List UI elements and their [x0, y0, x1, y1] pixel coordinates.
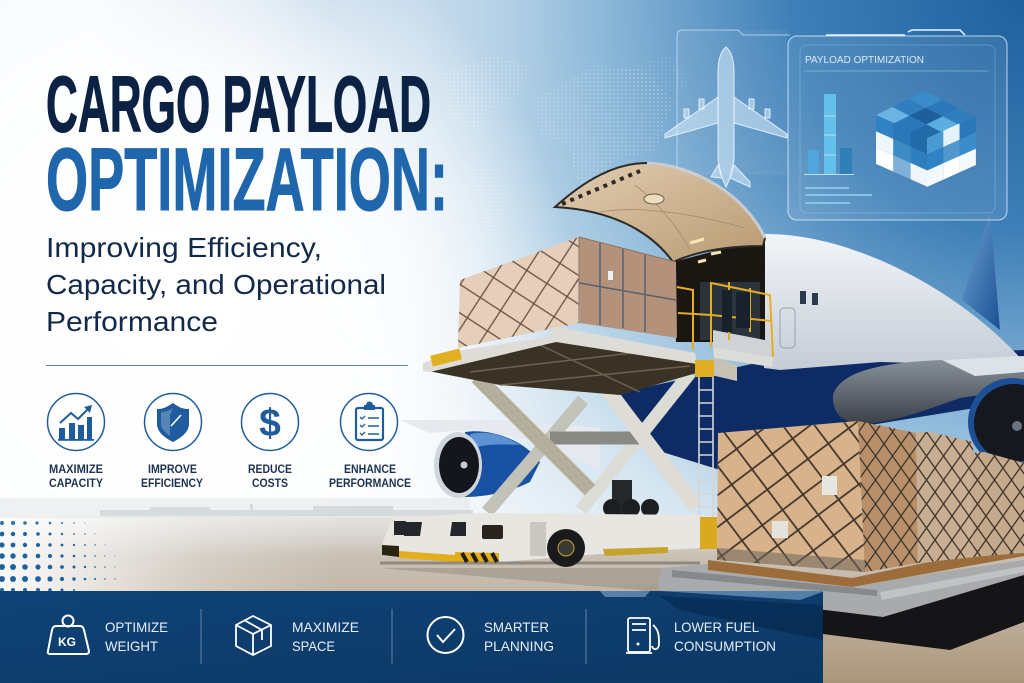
feature: maximize capacity: CAPACITY: [49, 478, 103, 490]
world map dotted texture: [440, 55, 690, 245]
main title: OPTIMIZATION:: [46, 129, 448, 229]
feature: enhance performance: PERFORMANCE: [329, 478, 411, 490]
lift truck: [380, 513, 700, 567]
HUD payload optimization panel: [788, 30, 1007, 220]
yellow safety railings: [677, 282, 773, 357]
airport ground: [0, 498, 1024, 683]
workers in cargo bay: [722, 290, 750, 332]
feature: reduce costs: REDUCE: [248, 464, 292, 476]
benefit: maximize space: SPACE: [292, 638, 335, 654]
bottom benefits band: [0, 591, 825, 683]
divider rule: [46, 364, 408, 366]
cargo door: [555, 163, 765, 342]
benefit: maximize space: [236, 616, 359, 655]
feature: reduce costs: [242, 394, 298, 490]
subtitle: Improving Efficiency,: [46, 232, 322, 263]
icon: shield: [157, 403, 189, 442]
subtitle: Capacity, and Operational: [46, 269, 386, 300]
left jet engine: [434, 431, 540, 498]
icon: rising bar chart: [58, 405, 94, 441]
bar chart: [804, 94, 854, 174]
benefit: lower fuel consumption: [626, 618, 776, 654]
cargo on lift platform: [458, 237, 677, 348]
feature: enhance performance: [329, 394, 411, 490]
benefit: smarter planning: PLANNING: [484, 638, 554, 654]
benefit: optimize weight: WEIGHT: [105, 638, 158, 654]
benefit: optimize weight: OPTIMIZE: [105, 619, 168, 635]
pallet dolly: [659, 548, 1024, 617]
feature: maximize capacity: MAXIMIZE: [49, 464, 103, 476]
benefit: smarter planning: SMARTER: [484, 619, 549, 635]
main title: [46, 60, 448, 229]
benefit: optimize weight: KG: [58, 635, 76, 649]
icon: wireframe aircraft: [665, 47, 787, 187]
feature: improve efficiency: EFFICIENCY: [141, 478, 203, 490]
aircraft fuselage: [610, 212, 1024, 470]
feature: enhance performance: ENHANCE: [344, 464, 396, 476]
HUD aircraft panel: [665, 30, 790, 187]
subtitle: Performance: [46, 306, 218, 337]
feature: improve efficiency: IMPROVE: [148, 464, 197, 476]
left wing behind lift: [400, 420, 600, 470]
legend lines: [805, 188, 872, 203]
panel heading: PAYLOAD OPTIMIZATION: [805, 55, 924, 66]
feature: reduce costs: COSTS: [252, 478, 288, 490]
benefit: maximize space: MAXIMIZE: [292, 619, 359, 635]
main title: CARGO PAYLOAD: [46, 60, 431, 148]
scissor lift: [477, 353, 696, 517]
benefit: lower fuel consumption: CONSUMPTION: [674, 638, 776, 654]
feature: maximize capacity: [48, 394, 104, 490]
isometric cargo cube: [876, 91, 976, 187]
decorative halftone dots: [0, 521, 116, 592]
benefit: lower fuel consumption: LOWER FUEL: [674, 619, 759, 635]
access ladder: [695, 360, 717, 549]
feature: improve efficiency: [141, 394, 203, 490]
lift platform deck: [423, 327, 773, 395]
icon: clipboard checklist: [356, 402, 383, 440]
subtitle: [46, 232, 386, 337]
icon: dollar sign: $: [259, 402, 281, 445]
front cargo pallets: [717, 421, 1024, 572]
right wing and engine: [833, 356, 1024, 466]
benefit: smarter planning: [428, 617, 554, 654]
benefit: optimize weight: [48, 616, 168, 654]
